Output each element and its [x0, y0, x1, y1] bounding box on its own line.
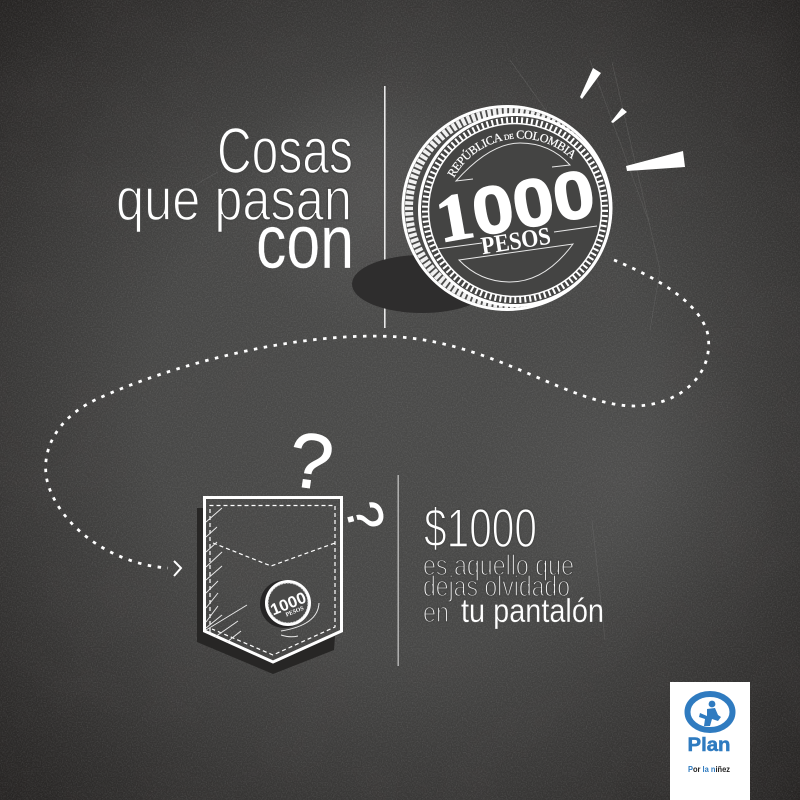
logo: Plan — [670, 682, 750, 800]
text block: $1000 es aquello que dejas olvidado en tu pantalón: en — [423, 597, 449, 629]
title: Cosas que pasan con — [116, 114, 354, 285]
title: Cosas que pasan con: que pasan — [116, 166, 352, 233]
icon: pocket — [197, 498, 342, 674]
text block: $1000 es aquello que dejas olvidado en tu pantalón: dejas olvidado — [423, 571, 570, 603]
icon: small question mark: ? — [334, 496, 396, 537]
mini coin: 1000 — [268, 590, 309, 619]
title: Cosas que pasan con: con — [256, 200, 354, 285]
coin unit: PESOS — [479, 223, 553, 260]
icon: big question mark: ? — [283, 414, 338, 508]
mini coin — [260, 580, 319, 637]
text block: $1000 es aquello que dejas olvidado en tu pantalón: $1000 — [424, 497, 537, 559]
title: Cosas que pasan con: Cosas — [217, 114, 353, 187]
coin shadow — [352, 255, 492, 313]
divider: upper vertical line — [384, 86, 386, 328]
text block: $1000 es aquello que dejas olvidado en tu pantalón: tu pantalón — [461, 592, 604, 629]
logo wordmark: Plan — [688, 735, 730, 756]
logo tagline: Por la niñez — [688, 765, 730, 774]
icon: 1000 pesos coin — [402, 105, 612, 311]
coin value: 1000 — [430, 156, 601, 257]
arrow: dotted path from coin to pocket — [46, 260, 709, 576]
text block: $1000 es aquello que dejas olvidado en tu pantalón — [423, 497, 604, 629]
mini coin: PESOS — [285, 605, 305, 618]
icon: shine rays — [580, 68, 685, 171]
coin engraved lines — [437, 143, 597, 282]
text block: $1000 es aquello que dejas olvidado en tu pantalón: es aquello que — [423, 550, 574, 582]
divider: lower vertical line — [398, 475, 399, 666]
coin legend: REPÚBLICA DE COLOMBIA — [447, 130, 574, 178]
